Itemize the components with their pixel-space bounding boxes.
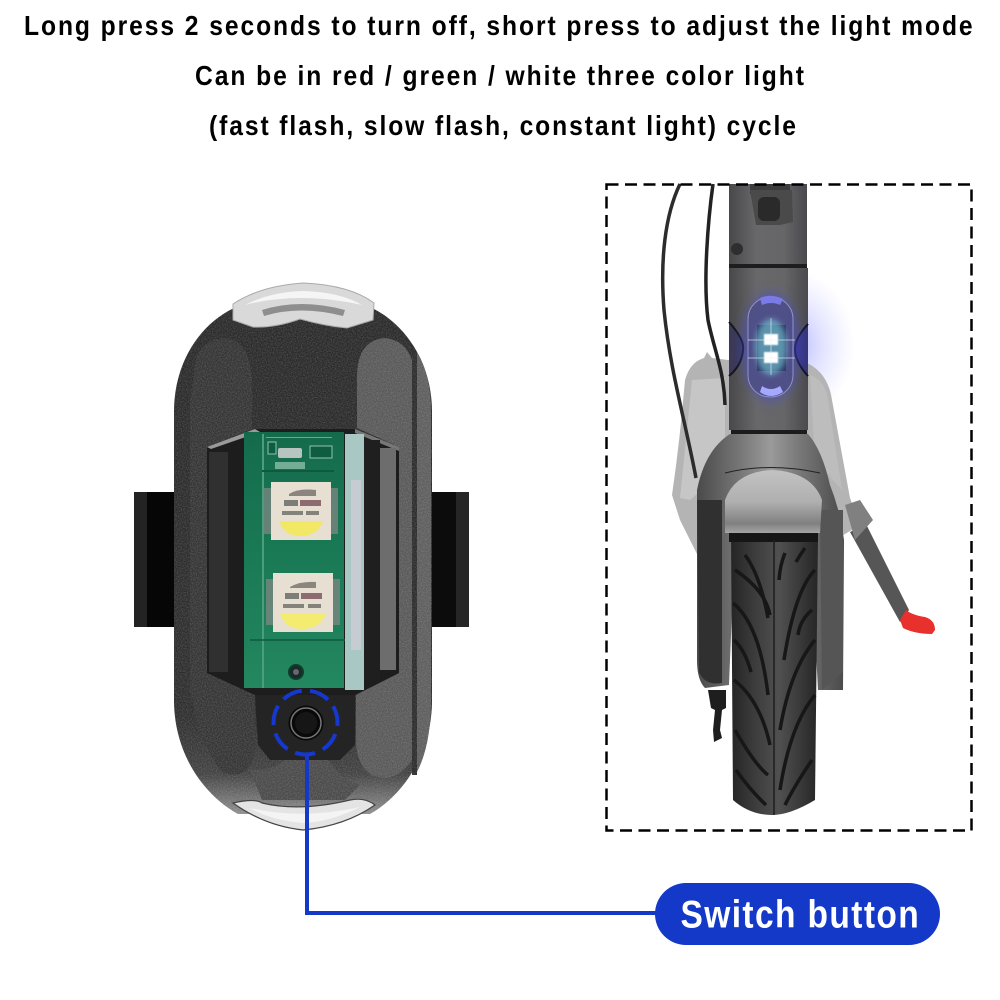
silver fender — [725, 470, 822, 533]
body side panels — [190, 338, 431, 800]
switch button — [255, 695, 355, 760]
LED chip: top — [264, 482, 338, 540]
heading: usage instructions: Long press 2 seconds to turn off, short press to adjust the light mode — [24, 10, 973, 41]
connector line to label — [307, 753, 660, 913]
light glow — [725, 270, 855, 420]
heading: usage instructions: (fast flash, slow flash, constant light) cycle — [209, 110, 796, 141]
right fork leg — [820, 510, 843, 690]
label: switch button: Switch button — [680, 892, 919, 936]
label: switch button — [655, 883, 940, 945]
mounting clips — [134, 492, 469, 627]
lower stem — [729, 268, 808, 430]
circuit board — [244, 432, 345, 688]
bottom lens — [233, 799, 375, 830]
display window — [207, 429, 399, 695]
top lens — [233, 283, 374, 328]
heading: usage instructions: Can be in red / green / white three color light — [195, 60, 804, 91]
brake cables — [663, 184, 725, 478]
kickstand — [845, 500, 935, 634]
device body — [174, 309, 432, 814]
upper stem and clamp — [729, 184, 807, 268]
panel: scooter photo — [663, 184, 935, 815]
left fork leg — [697, 500, 722, 684]
LED chip: bottom — [266, 573, 340, 632]
mounted light on stem — [729, 292, 808, 402]
dashed highlight ring — [274, 690, 338, 754]
scooter deck — [672, 352, 860, 560]
red rubber foot — [900, 610, 935, 634]
valve stem — [708, 690, 726, 742]
product photo: strobe light device — [134, 283, 469, 830]
heading: usage instructions — [24, 10, 973, 141]
dashed frame — [606, 184, 972, 830]
front tire — [729, 533, 818, 815]
fork arch — [697, 434, 844, 690]
